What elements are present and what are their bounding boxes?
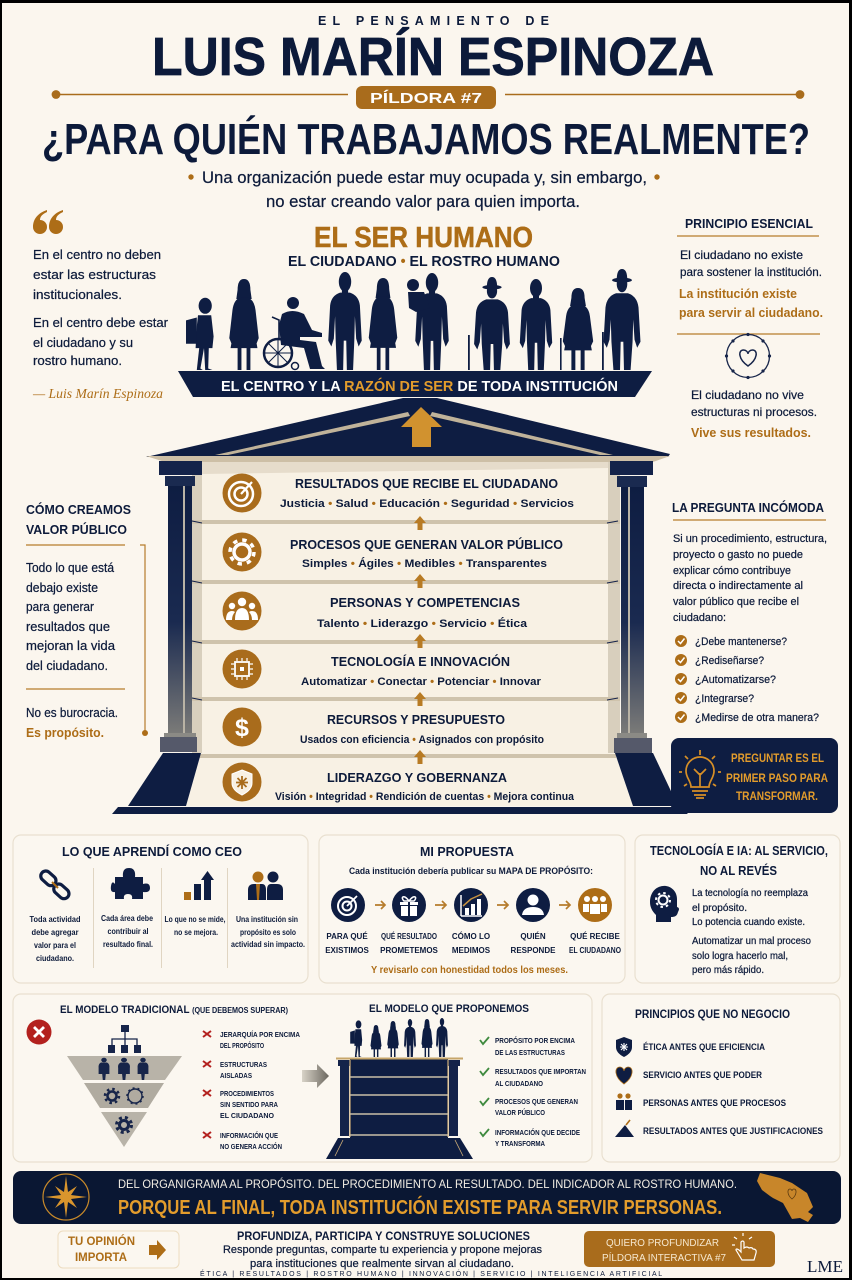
process arrows <box>375 901 570 909</box>
panel: principio esencial <box>677 217 823 440</box>
panel: la pregunta incómoda: proyecto o gasto no puede <box>673 549 803 561</box>
panel: cómo creamos valor público: Es propósito. <box>26 726 104 740</box>
man <box>520 279 552 370</box>
button: quiero profundizar <box>584 1231 775 1267</box>
button: quiero profundizar: QUIERO PROFUNDIZAR <box>606 1237 719 1249</box>
panel: mi propuesta: MI PROPUESTA <box>420 844 515 859</box>
footer tags: ÉTICA | RESULTADOS | ROSTRO HUMANO | INNOVACIÓN | SERVICIO | INTELIGENCIA ARTIFICIAL <box>200 1269 663 1278</box>
panel: tecnología e IA <box>635 835 840 983</box>
child with backpack <box>186 298 214 370</box>
row: procesos: Simples • Ágiles • Medibles • Transparentes <box>302 557 547 570</box>
right column <box>610 461 678 806</box>
callout: preguntar: PREGUNTAR ES EL <box>731 753 824 765</box>
checklist: ¿Medirse de otra manera? <box>695 712 819 724</box>
row: procesos: PROCESOS QUE GENERAN VALOR PÚBLICO <box>290 537 563 552</box>
icon: mountain with flag <box>615 1120 634 1137</box>
checklist <box>675 635 819 724</box>
heading: modelo propuesto: EL MODELO QUE PROPONEMOS <box>369 1003 529 1015</box>
checklist: ¿Automatizarse? <box>695 674 776 686</box>
icon: person <box>516 888 550 922</box>
icon: chart <box>454 888 488 922</box>
panel: cómo creamos valor público: Todo lo que está <box>26 560 115 575</box>
icon: chain link <box>39 869 71 901</box>
row: personas <box>222 592 528 630</box>
proposed list: INFORMACIÓN QUE DECIDE <box>495 1128 580 1137</box>
main title: LUIS MARÍN ESPINOZA <box>152 27 714 87</box>
man <box>328 272 362 370</box>
row: liderazgo: Visión • Integridad • Rendición de cuentas • Mejora continua <box>275 791 575 803</box>
panel: principios que no negocio: RESULTADOS ANTES QUE JUSTIFICACIONES <box>643 1126 823 1137</box>
proposed list <box>480 1036 586 1148</box>
panel: tecnología e IA: NO AL REVÉS <box>700 863 777 878</box>
quote text <box>33 247 169 368</box>
quote text: el ciudadano y su <box>33 335 133 350</box>
panel: la pregunta incómoda: directa o indirectamente al <box>673 580 803 592</box>
center heading <box>288 222 560 270</box>
panel: tecnología e IA: pero más rápido. <box>692 965 764 976</box>
checklist: ¿Integrarse? <box>695 693 754 705</box>
header <box>42 14 810 211</box>
CEO lessons text: propósito es solo <box>240 927 296 937</box>
center heading: EL SER HUMANO <box>314 222 533 254</box>
closing banner: DEL ORGANIGRAMA AL PROPÓSITO. DEL PROCEDIMIENTO AL RESULTADO. DEL INDICADOR AL ROSTRO HUMANO. <box>118 1176 737 1191</box>
panel: principio esencial: El ciudadano no existe <box>680 248 803 262</box>
proposed people <box>350 1018 448 1057</box>
icon: shield <box>222 762 262 802</box>
banner: reason for being: EL CENTRO Y LA RAZÓN DE SER DE TODA INSTITUCIÓN <box>221 377 618 395</box>
elder man with hat <box>602 269 640 370</box>
panel: la pregunta incómoda: explicar cómo contribuye <box>673 565 791 577</box>
callout: preguntar: PRIMER PASO PARA <box>726 773 828 785</box>
step labels: QUÉ RECIBE <box>570 932 621 941</box>
step labels: QUIÉN <box>520 932 546 941</box>
panel: tecnología e IA: Automatizar un mal proceso <box>692 936 811 947</box>
panel: cómo creamos valor público: No es burocracia. <box>26 705 118 720</box>
proposed list: PROPÓSITO POR ENCIMA <box>495 1036 576 1045</box>
row: personas: PERSONAS Y COMPETENCIAS <box>330 595 520 610</box>
heading: modelo tradicional: EL MODELO TRADICIONAL (QUE DEBEMOS SUPERAR) <box>60 1004 288 1016</box>
traditional list: SIN SENTIDO PARA <box>220 1100 279 1109</box>
proposed list: Y TRANSFORMA <box>495 1139 546 1148</box>
panel: cómo creamos valor público: del ciudadano. <box>26 658 108 673</box>
icon: puzzle <box>111 868 150 899</box>
checklist: ¿Debe mantenerse? <box>695 636 787 648</box>
button: tu opinión importa: IMPORTA <box>75 1250 127 1264</box>
row: liderazgo <box>222 762 575 803</box>
icon: head with gear <box>650 886 679 922</box>
icon: dollar <box>222 708 262 746</box>
CEO lessons text: no se mejora. <box>174 927 218 937</box>
call to action text: PROFUNDIZA, PARTICIPA Y CONSTRUYE SOLUCIONES <box>237 1231 530 1243</box>
woman <box>369 278 397 370</box>
icon: red X <box>26 1020 52 1044</box>
step labels: EL CIUDADANO <box>569 946 621 955</box>
proposed building <box>326 1058 473 1159</box>
map: Costa Rica <box>757 1173 813 1222</box>
icon: growth bars <box>184 871 214 900</box>
intro text: no estar creando valor para quien importa. <box>266 193 580 211</box>
inverted pyramid <box>67 1056 182 1147</box>
call to action text <box>223 1231 542 1270</box>
temple interior panels <box>186 461 633 806</box>
call to action text: para instituciones que realmente sirvan al ciudadano. <box>250 1258 514 1270</box>
panel: tecnología e IA: Lo potencia cuando existe. <box>692 917 805 928</box>
icon: para qué existimos <box>331 888 365 922</box>
elder with hat and cane <box>468 277 510 370</box>
CEO lessons text: Toda actividad <box>30 914 80 924</box>
panel: cómo creamos valor público: mejoran la vida <box>26 638 116 653</box>
icon: lightbulb <box>679 750 721 798</box>
CEO lessons text: resultado final. <box>103 939 153 949</box>
quote text: En el centro debe estar <box>33 315 169 330</box>
panel: mi propuesta: Y revisarlo con honestidad todos los meses. <box>371 965 568 976</box>
left column <box>128 461 202 806</box>
traditional list: DEL PROPÓSITO <box>220 1041 264 1050</box>
panel: la pregunta incómoda: ciudadano: <box>673 612 726 624</box>
button: quiero profundizar: PÍLDORA INTERACTIVA #7 <box>602 1251 726 1264</box>
row: procesos <box>222 532 563 572</box>
step labels: QUÉ RESULTADO <box>381 932 437 941</box>
step labels: EXISTIMOS <box>325 946 369 955</box>
step labels: PARA QUÉ <box>326 932 368 941</box>
proposed list: AL CIUDADANO <box>495 1079 543 1088</box>
icon: heart <box>616 1067 632 1084</box>
callout: preguntar: TRANSFORMAR. <box>736 791 818 803</box>
callout: preguntar <box>671 738 838 813</box>
icon: arrow <box>149 1240 166 1260</box>
panel: principio esencial: para servir al ciudadano. <box>679 306 823 320</box>
traditional list: EL CIUDADANO <box>220 1111 274 1120</box>
row: recursos: RECURSOS Y PRESUPUESTO <box>327 712 505 727</box>
icon: dollar: $ <box>235 714 249 742</box>
org chart <box>108 1025 141 1053</box>
icon: people <box>222 592 262 630</box>
traditional list: NO GENERA ACCIÓN <box>220 1142 282 1151</box>
CEO lessons text: Lo que no se mide, <box>164 914 226 924</box>
panel: cómo creamos valor público: resultados que <box>26 619 110 634</box>
roof <box>146 398 670 462</box>
quote panel <box>32 210 169 402</box>
panel: la pregunta incómoda: LA PREGUNTA INCÓMODA <box>672 500 824 515</box>
temple floor <box>112 807 688 814</box>
panel: cómo creamos valor público: VALOR PÚBLICO <box>26 522 127 537</box>
checklist: ¿Rediseñarse? <box>695 655 764 667</box>
panel: tecnología e IA: La tecnología no reemplaza <box>692 888 808 899</box>
step labels: CÓMO LO <box>452 932 490 941</box>
icon: compass <box>43 1174 89 1220</box>
row: recursos: Usados con eficiencia • Asignados con propósito <box>300 734 544 746</box>
row: tecnologia <box>222 650 542 688</box>
icon: shield star <box>616 1037 632 1057</box>
small arrows between floors <box>414 516 426 764</box>
icon: pointing hand <box>732 1233 756 1260</box>
panel: cómo creamos valor público: CÓMO CREAMOS <box>26 502 131 517</box>
woman <box>229 279 259 370</box>
icon: chip <box>222 650 262 688</box>
quote text: estar las estructuras <box>33 267 157 282</box>
pill ornament <box>52 86 804 109</box>
icon: gift <box>392 888 426 922</box>
CEO lessons text: ciudadano. <box>36 953 74 963</box>
row: resultados <box>222 474 574 512</box>
panel: cómo creamos valor público: para generar <box>26 599 95 614</box>
CEO lessons text: Cada área debe <box>101 913 153 923</box>
intro text <box>188 169 660 211</box>
signature: — Luis Marín Espinoza <box>32 387 163 402</box>
panel: mi propuesta: Cada institución debería publicar su MAPA DE PROPÓSITO: <box>349 865 593 877</box>
closing banner <box>13 1171 841 1224</box>
step labels: RESPONDE <box>511 946 556 955</box>
icon: quote mark <box>33 210 63 234</box>
panel: mi propuesta <box>319 835 625 983</box>
logo: LME: LME <box>807 1257 843 1276</box>
CEO lessons text <box>30 913 305 963</box>
panel: principio esencial: PRINCIPIO ESENCIAL <box>685 217 813 231</box>
call to action text: Responde preguntas, comparte tu experiencia y propone mejoras <box>223 1244 542 1256</box>
older woman with cane <box>560 288 593 370</box>
button: tu opinión importa <box>58 1231 179 1268</box>
man holding baby <box>407 273 449 370</box>
person in wheelchair <box>264 297 325 370</box>
pill ornament: PÍLDORA #7 <box>370 90 482 107</box>
panel: tecnología e IA: el propósito. <box>692 903 747 914</box>
panel: la pregunta incómoda <box>671 500 838 813</box>
panel: cómo creamos valor público: debajo existe <box>26 580 98 595</box>
traditional list <box>203 1030 301 1151</box>
closing banner: PORQUE AL FINAL, TODA INSTITUCIÓN EXISTE PARA SERVIR PERSONAS. <box>118 1195 722 1219</box>
panel: lo que aprendí como CEO: LO QUE APRENDÍ COMO CEO <box>62 844 242 859</box>
step labels: PROMETEMOS <box>380 946 439 955</box>
quote text: En el centro no deben <box>33 247 161 262</box>
banner: reason for being <box>178 371 652 397</box>
panel: principio esencial: El ciudadano no vive <box>691 388 804 402</box>
arrow: transition <box>302 1064 329 1088</box>
icon: target <box>222 474 262 512</box>
proposed list: VALOR PÚBLICO <box>495 1108 545 1117</box>
icon: two executives <box>248 872 283 900</box>
citizens silhouettes <box>186 269 640 370</box>
traditional list: ESTRUCTURAS <box>220 1060 267 1069</box>
icon: citizens <box>578 888 612 922</box>
panel: cómo creamos valor público <box>26 502 148 740</box>
CEO lessons text: actividad sin impacto. <box>231 939 305 949</box>
panel: principio esencial: estructuras ni procesos. <box>691 405 817 419</box>
eyebrow title: EL PENSAMIENTO DE <box>318 14 549 28</box>
row: resultados: RESULTADOS QUE RECIBE EL CIUDADANO <box>295 476 558 491</box>
row: resultados: Justicia • Salud • Educación • Seguridad • Servicios <box>280 498 574 510</box>
panel: principio esencial: Vive sus resultados. <box>691 426 811 440</box>
row: recursos <box>222 708 544 746</box>
traditional list: AISLADAS <box>220 1071 252 1080</box>
traditional list: INFORMACIÓN QUE <box>220 1131 278 1140</box>
panel: principio esencial: para sostener la institución. <box>680 265 822 279</box>
step labels <box>325 932 621 955</box>
button: tu opinión importa: TU OPINIÓN <box>68 1233 135 1248</box>
traditional list: JERARQUÍA POR ENCIMA <box>220 1030 301 1039</box>
quote text: rostro humano. <box>33 353 122 368</box>
proposed list: PROCESOS QUE GENERAN <box>495 1097 578 1106</box>
panel: principios que no negocio <box>602 994 840 1162</box>
CEO lessons text: Una institución sin <box>236 914 298 924</box>
arrow up <box>401 407 442 447</box>
row: tecnologia: TECNOLOGÍA E INNOVACIÓN <box>331 654 510 669</box>
step labels: MEDIMOS <box>452 946 491 955</box>
row: personas: Talento • Liderazgo • Servicio • Ética <box>317 617 528 630</box>
intro text: Una organización puede estar muy ocupada y, sin embargo, <box>202 169 647 187</box>
panel: principios que no negocio: PERSONAS ANTES QUE PROCESOS <box>643 1098 786 1109</box>
proposed list: DE LAS ESTRUCTURAS <box>495 1048 565 1057</box>
CEO lessons text: contribuir al <box>108 926 148 936</box>
icon: heart in circle <box>725 333 771 379</box>
panel: la pregunta incómoda: Si un procedimiento, estructura, <box>673 533 827 545</box>
CEO lessons text: valor para el <box>34 940 76 950</box>
traditional list: PROCEDIMIENTOS <box>220 1089 274 1098</box>
center heading: EL CIUDADANO • EL ROSTRO HUMANO <box>288 254 560 270</box>
row: tecnologia: Automatizar • Conectar • Potenciar • Innovar <box>301 676 542 688</box>
row: liderazgo: LIDERAZGO Y GOBERNANZA <box>327 770 508 785</box>
panel: lo que aprendí como CEO <box>13 835 308 983</box>
panel: principios que no negocio: ÉTICA ANTES QUE EFICIENCIA <box>643 1042 765 1053</box>
panel: tecnología e IA: solo logra hacerlo mal, <box>692 951 788 962</box>
quote text: institucionales. <box>33 287 122 302</box>
icon: gear <box>222 532 262 572</box>
proposed list: RESULTADOS QUE IMPORTAN <box>495 1067 586 1076</box>
panel: principios que no negocio: PRINCIPIOS QUE NO NEGOCIO <box>635 1009 790 1021</box>
temple <box>112 398 688 814</box>
panel: la pregunta incómoda: valor público que recibe el <box>673 596 799 608</box>
icon: people pair <box>616 1093 632 1110</box>
panel: modelos <box>13 994 592 1162</box>
panel: principios que no negocio: SERVICIO ANTES QUE PODER <box>643 1070 762 1081</box>
CEO lessons text: debe agregar <box>32 927 79 937</box>
panel: principio esencial: La institución existe <box>679 287 797 301</box>
